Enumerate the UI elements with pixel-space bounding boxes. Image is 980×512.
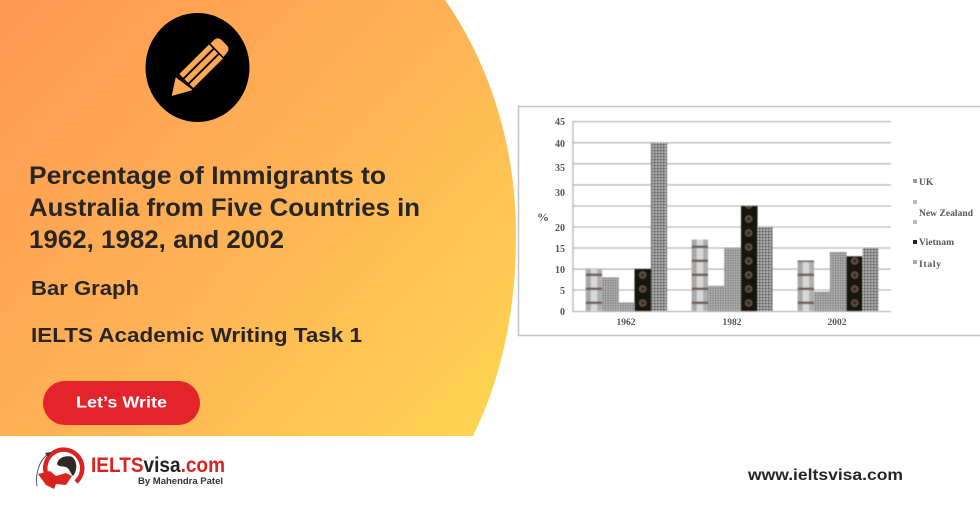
- website url: www.ieltsvisa.com: [747, 467, 903, 484]
- x axis labels: 1962: [616, 318, 636, 328]
- y axis labels: 45: [555, 117, 565, 128]
- orange background panel: [0, 0, 516, 436]
- y axis labels: [555, 117, 565, 318]
- icon: pencil in black circle: [146, 13, 250, 122]
- bars 2002: [798, 248, 878, 311]
- legend: UK: [919, 178, 934, 188]
- y axis labels: 10: [555, 265, 565, 276]
- y axis labels: 30: [555, 188, 565, 199]
- bars 1962: [586, 143, 667, 311]
- chart panel: [518, 106, 980, 336]
- y axis labels: 40: [555, 139, 565, 150]
- title: [29, 162, 420, 254]
- logo tagline: By Mahendra Patel: [138, 476, 223, 487]
- legend: Italy: [919, 260, 941, 270]
- x axis labels: [616, 318, 847, 328]
- legend: New Zealand: [919, 209, 974, 219]
- subtitle: bar graph: Bar Graph: [31, 278, 139, 300]
- y axis labels: 5: [560, 286, 565, 297]
- x axis labels: 1982: [722, 318, 742, 328]
- logo wordmark: IELTSvisa.com: [91, 454, 225, 477]
- title: 1962, 1982, and 2002: [29, 226, 284, 254]
- logo icon: [37, 450, 82, 489]
- y axis labels: 15: [555, 244, 565, 255]
- subtitle: task: IELTS Academic Writing Task 1: [31, 324, 362, 347]
- y axis labels: 0: [560, 307, 565, 318]
- y axis title: %: [537, 210, 549, 224]
- x axis labels: 2002: [828, 318, 847, 328]
- y axis labels: 35: [555, 163, 565, 174]
- legend: Vietnam: [919, 238, 954, 248]
- title: Australia from Five Countries in: [29, 194, 420, 222]
- bars 1982: [692, 206, 772, 311]
- button: let's write: [43, 381, 200, 425]
- logo: IELTSvisa: [37, 450, 225, 489]
- y axis labels: 20: [555, 223, 565, 234]
- title: Percentage of Immigrants to: [29, 162, 386, 190]
- grid lines and axes: [573, 121, 891, 312]
- button: let's write: Let’s Write: [76, 394, 167, 412]
- legend: [913, 178, 974, 270]
